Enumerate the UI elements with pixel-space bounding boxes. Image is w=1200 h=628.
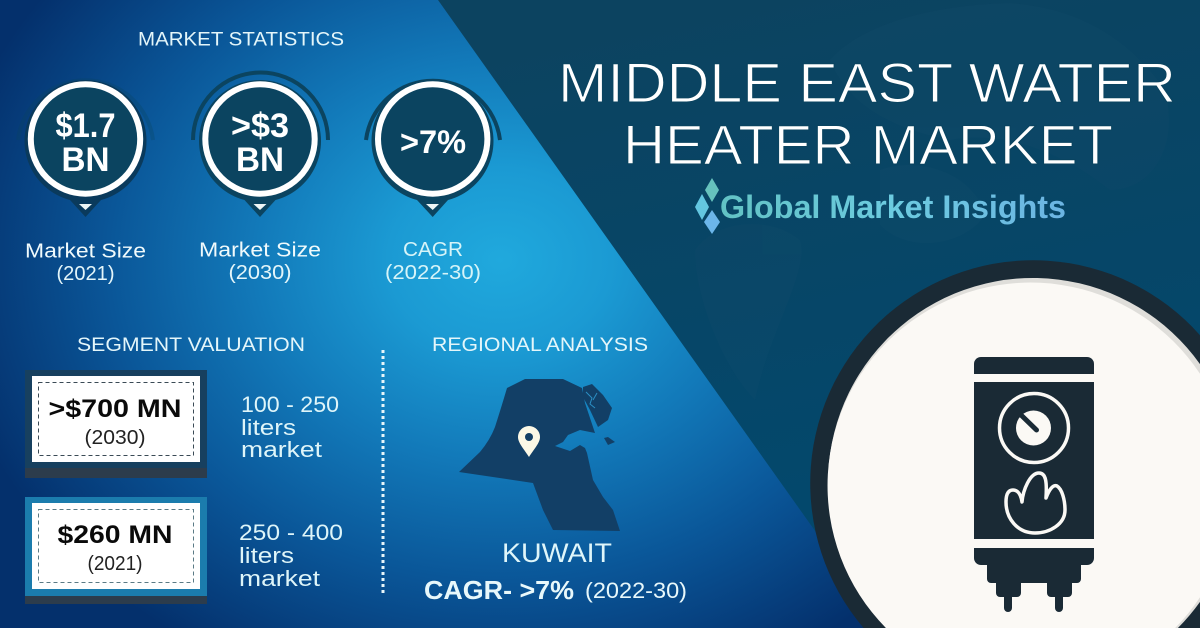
stat badge: CAGR: >7%: [400, 124, 466, 160]
title: [558, 51, 1176, 176]
segment card: 260 MN: [25, 497, 207, 604]
segment label: 250-400 liters: 250 - 400: [239, 520, 343, 545]
stat badge: CAGR: CAGR: [403, 239, 463, 261]
segment card: 700 MN: >$700 MN: [48, 395, 182, 423]
stat badge: market size 2030: Market Size: [199, 240, 321, 262]
icon: water heater: [974, 357, 1094, 612]
title: MIDDLE EAST WATER: [558, 51, 1176, 114]
segment label: 100-250 liters: [241, 392, 339, 462]
water heater circle: [810, 260, 1200, 628]
stat badge: market size 2030: [193, 72, 328, 284]
section heading: segment valuation: SEGMENT VALUATION: [77, 335, 305, 356]
stat badge: market size 2021: BN: [62, 141, 110, 179]
segment label: 100-250 liters: 100 - 250: [241, 392, 339, 417]
logo: Global Market Insights: Global Market Insights: [720, 189, 1066, 225]
segment label: 250-400 liters: [239, 520, 343, 591]
title: HEATER MARKET: [623, 113, 1113, 176]
icon: location pin: [518, 426, 540, 457]
section heading: market statistics: MARKET STATISTICS: [138, 30, 344, 50]
section heading: regional analysis: REGIONAL ANALYSIS: [432, 335, 648, 356]
logo: Global Market Insights: [695, 178, 1066, 234]
segment card: 700 MN: [25, 370, 207, 478]
stat badge: market size 2021: (2021): [56, 263, 114, 285]
segment card: 700 MN: (2030): [84, 427, 146, 449]
stat badge: market size 2030: >$3: [231, 107, 289, 145]
faint world map: [695, 3, 1169, 400]
region name: KUWAIT: [502, 538, 612, 568]
regional CAGR: CAGR- >7%: [424, 575, 574, 605]
segment label: 100-250 liters: liters: [241, 415, 296, 440]
stat badge: CAGR: (2022-30): [385, 262, 481, 284]
dark diagonal panel: [438, 0, 1200, 628]
stat badge: market size 2021: Market Size: [25, 240, 146, 262]
map: Kuwait: [459, 379, 620, 531]
segment label: 100-250 liters: market: [241, 437, 322, 462]
stat badge: market size 2030: (2030): [228, 262, 292, 284]
segment label: 250-400 liters: liters: [239, 543, 294, 568]
segment label: 250-400 liters: market: [239, 566, 320, 591]
icon: flame: [1006, 473, 1065, 533]
stat badge: CAGR: [366, 80, 500, 284]
stat badge: market size 2021: $1.7: [56, 107, 116, 145]
segment card: 260 MN: (2021): [88, 553, 142, 575]
stat badge: market size 2021: [18, 80, 153, 285]
icon: temperature gauge: [1000, 394, 1068, 462]
segment card: 260 MN: $260 MN: [58, 521, 172, 549]
regional CAGR: [424, 575, 687, 605]
stat badge: market size 2030: BN: [236, 141, 284, 179]
dotted divider: [382, 350, 384, 593]
regional CAGR: (2022-30): [585, 578, 687, 603]
